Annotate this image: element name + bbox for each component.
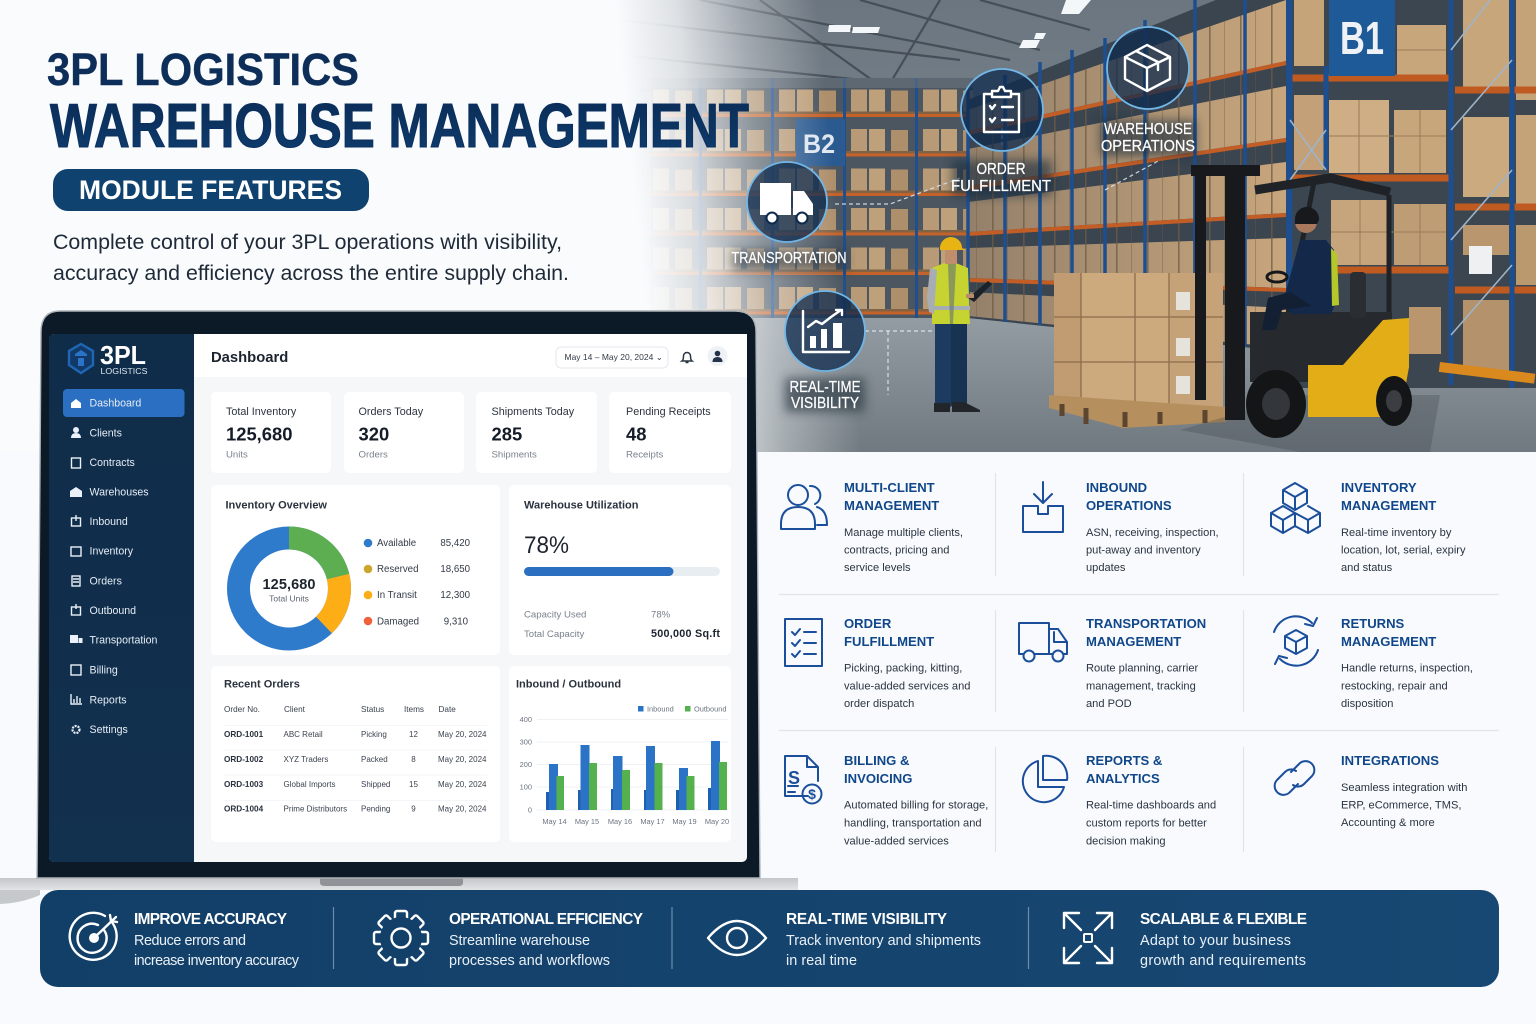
left fade overlay [0,0,900,452]
panel: warehouse utilization: Warehouse Utilization [524,500,639,512]
feature: transportation management: Route planning, carrier [1086,662,1199,674]
row ORD-1001: 12 [409,730,418,739]
KPI: orders today: Orders Today [358,406,424,418]
KPI: shipments today: 285 [492,424,522,444]
node: transportation [732,162,846,270]
row ORD-1001: ABC Retail [284,730,323,739]
x axis labels: May 16 [608,817,632,826]
x axis labels [542,817,729,826]
feature: order fulfillment: order dispatch [844,698,914,710]
nav: Orders: Orders [90,576,122,588]
nav: Outbound: Outbound [90,605,136,617]
active item highlight [63,389,184,417]
feature: billing & invoicing: Automated billing for storage, [844,800,988,812]
KPI: pending receipts: Pending Receipts [626,406,711,418]
feature: order fulfillment: ORDER [844,616,892,631]
feature: reports & analytics: REPORTS & [1086,753,1163,768]
screen background [49,334,747,862]
feature: transportation management [1019,616,1206,710]
legend: Outbound [694,704,726,714]
benefits banner [40,890,1499,987]
nav: Settings [72,724,128,736]
warehouse photo scene [0,0,1536,452]
benefit: improve accuracy: IMPROVE ACCURACY [134,911,288,928]
row ORD-1004: Pending [361,804,390,814]
x axis labels: May 19 [672,817,697,826]
row ORD-1003: 15 [409,780,418,789]
row ORD-1004: ORD-1004 [224,804,264,814]
y axis: 100 [520,782,532,792]
legend: Damaged [377,616,419,628]
donut chart [238,538,340,639]
progress bar [524,567,720,576]
subtitle: Complete control of your 3PL operations with visibility, [53,231,562,254]
node: order fulfillment [951,69,1052,196]
row ORD-1003 [224,780,487,789]
title line 2: WAREHOUSE MANAGEMENT [50,92,749,161]
nav: Settings: Settings [90,724,128,736]
feature: integrations: Accounting & more [1341,817,1435,829]
laptop with dashboard [0,311,798,904]
feature: multi-client management: MANAGEMENT [844,498,939,513]
feature: inbound operations: put-away and inventory [1086,544,1201,556]
subtitle: accuracy and efficiency across the entire supply chain. [53,262,569,285]
row ORD-1001 [224,730,487,739]
feature: billing & invoicing: BILLING & [844,753,910,768]
row ORD-1003: Global Imports [284,780,336,789]
feature: reports & analytics [1023,753,1216,848]
KPI: orders today: Orders [358,450,388,460]
y axis [520,715,728,814]
nav: Billing: Billing [90,664,118,676]
row ORD-1002: May 20, 2024 [438,755,487,764]
nav: Inbound: Inbound [90,516,128,528]
row ORD-1002: XYZ Traders [284,755,328,764]
x axis labels: May 14 [542,817,567,826]
nav: Clients: Clients [90,428,122,440]
row ORD-1002 [224,755,487,764]
table header [224,705,456,714]
feature: integrations [1275,753,1467,829]
legend: 9,310 [444,616,469,628]
icon: inbound box [1023,482,1063,532]
icon: eye [708,921,766,955]
row ORD-1004: Prime Distributors [284,804,347,814]
nav: Clients [71,427,122,440]
feature: billing & invoicing: INVOICING [844,771,912,786]
feature: multi-client management: MULTI-CLIENT [844,480,935,495]
legend: In Transit [377,590,417,601]
KPI: shipments today [476,392,597,473]
pallet of cartons [1049,273,1226,428]
KPI: orders today [344,392,464,473]
feature: inventory management: MANAGEMENT [1341,498,1436,513]
KPI: orders today: 320 [358,424,389,444]
label: REAL-TIME [790,379,860,396]
panel: recent orders [211,666,500,842]
benefit: operational efficiency: Streamline warehouse [449,933,590,949]
icon: clipboard [984,87,1019,132]
date range: May 14 – May 20, 2024 ⌄ [564,352,663,362]
feature: reports & analytics: decision making [1086,836,1166,848]
feature: order fulfillment [785,616,970,710]
panel: warehouse utilization: 500,000 Sq.ft [651,628,720,640]
panel: inbound / outbound chart [509,666,731,842]
icon: invoice [785,756,822,804]
row ORD-1001: Picking [361,730,387,739]
x axis labels: May 17 [640,817,665,826]
badge: module features [53,169,369,211]
feature: multi-client management [781,480,963,574]
KPI: total inventory: Total Inventory [226,406,297,418]
ceiling and back wall [600,0,1536,452]
icon: checklist [785,619,822,666]
icon: returns cycle [1274,616,1318,666]
row ORD-1001: ORD-1001 [224,730,264,739]
legend [364,538,471,628]
legend: Reserved [377,564,418,575]
benefit: improve accuracy: increase inventory accuracy [134,953,300,969]
y axis: 200 [520,760,532,769]
icon: target [70,913,117,960]
right big rack [1288,0,1536,388]
icon: invoice: S [788,768,800,788]
legend: 85,420 [440,538,471,549]
nav: Outbound [72,604,136,617]
KPI: pending receipts [609,392,731,473]
benefit: operational efficiency: OPERATIONAL EFFICIENCY [449,911,644,928]
logo: LOGISTICS [100,366,148,376]
KPI: total inventory: 125,680 [226,424,292,444]
legend: Available [377,538,416,549]
benefit: real-time visibility [708,911,981,969]
donut chart: 125,680 [262,577,316,593]
benefit: real-time visibility: REAL-TIME VISIBILITY [786,911,948,928]
feature: inbound operations: updates [1086,562,1126,574]
icon: gear [374,911,428,965]
row ORD-1004: 9 [411,804,416,814]
nav: Orders [72,576,122,588]
row ORD-1003: May 20, 2024 [438,780,487,789]
feature: returns management: Handle returns, inspection, [1341,662,1473,674]
feature: order fulfillment: FULFILLMENT [844,634,934,649]
bars [546,741,727,810]
connector lines [835,128,1160,395]
header bar: Dashboard [211,350,288,366]
feature: inbound operations: OPERATIONS [1086,498,1172,513]
row ORD-1004 [224,804,487,814]
table header: Items [404,705,424,714]
panel: warehouse utilization [509,485,731,655]
forklift with driver [1180,165,1440,452]
title line 1: 3PL LOGISTICS [47,44,359,95]
nav: Inventory: Inventory [90,546,134,558]
icon: truck [760,183,813,224]
nav: Warehouses: Warehouses [90,486,149,498]
nav: Inbound [72,515,128,528]
logo: 3PL [100,340,146,370]
date range [556,347,668,368]
logo [69,340,148,376]
icon: users [781,485,827,529]
icon: expand arrows [1064,913,1112,963]
benefit: real-time visibility: in real time [786,953,857,969]
icon: pie chart [1023,756,1067,802]
feature: integrations: INTEGRATIONS [1341,753,1439,768]
label: TRANSPORTATION [732,250,846,267]
benefit: operational efficiency [374,911,644,969]
feature: inventory management: Real-time inventory by [1341,527,1452,539]
sidebar [49,334,194,862]
back rack with boxes and B2 sign [650,78,974,318]
label: WAREHOUSE [1104,121,1192,138]
feature: transportation management: and POD [1086,698,1132,710]
x axis labels: May 15 [575,817,599,826]
feature: reports & analytics: ANALYTICS [1086,771,1160,786]
feature: transportation management: TRANSPORTATION [1086,616,1206,631]
label: OPERATIONS [1101,138,1195,155]
receding rack [968,0,1290,352]
x axis labels: May 20 [705,817,729,826]
y axis: 400 [520,715,532,724]
KPI: shipments today: Shipments Today [492,406,575,418]
nav: Contracts: Contracts [90,457,135,469]
feature: inventory management: INVENTORY [1341,480,1417,495]
icon: invoice: $ [808,786,816,802]
benefit: improve accuracy [70,911,300,969]
panel: warehouse utilization: Total Capacity [524,629,584,640]
panel: inventory overview [211,485,500,655]
feature: multi-client management: service levels [844,562,911,574]
feature: inventory management [1271,480,1466,574]
feature: inbound operations: INBOUND [1086,480,1147,495]
legend: 12,300 [440,590,471,601]
legend: 18,650 [440,564,471,575]
feature: returns management: MANAGEMENT [1341,634,1436,649]
panel: recent orders: Recent Orders [224,678,300,690]
feature: returns management: disposition [1341,698,1393,710]
feature: reports & analytics: custom reports for better [1086,818,1207,830]
legend: Inbound [647,704,674,714]
feature: returns management [1274,616,1473,710]
laptop bezel [37,311,760,878]
node: real-time visibility [785,291,865,412]
feature: transportation management: MANAGEMENT [1086,634,1181,649]
icon: user avatar [708,346,728,366]
row ORD-1004: May 20, 2024 [438,804,487,814]
icon: carton [1125,45,1170,91]
table header: Date [438,705,456,714]
feature: reports & analytics: Real-time dashboards and [1086,800,1216,812]
title block [47,44,749,285]
y axis: 300 [520,738,532,746]
row ORD-1001: May 20, 2024 [438,730,487,739]
feature: order fulfillment: value-added services and [844,680,970,692]
nav: Reports [71,694,127,706]
benefit: scalable & flexible: Adapt to your business [1140,933,1291,949]
panel: warehouse utilization: 78% [651,610,671,620]
worker with tablet [927,237,992,412]
benefit: operational efficiency: processes and workflows [449,953,610,969]
table header: Status [361,705,384,714]
label: FULFILLMENT [951,178,1051,195]
feature: billing & invoicing: handling, transportation and [844,818,982,830]
icon: chain link [1275,761,1314,795]
icon: bell [682,352,692,362]
KPI: pending receipts: 48 [626,424,646,444]
feature: multi-client management: contracts, pricing and [844,544,949,556]
label: ORDER [976,161,1026,178]
floor [600,318,1536,452]
benefit: improve accuracy: Reduce errors and [134,933,246,949]
benefit: scalable & flexible: growth and requirements [1140,953,1306,969]
panel: warehouse utilization: 78% [524,532,569,559]
nav: Dashboard: Dashboard [90,398,141,410]
feature: integrations: ERP, eCommerce, TMS, [1341,800,1461,812]
icon: truck [1019,623,1067,654]
legend [638,704,726,714]
table header: Client [284,705,306,714]
nav: Inventory [71,546,134,558]
icon: rising chart [803,310,849,352]
KPI: shipments today: Shipments [492,450,537,460]
feature: inbound operations: ASN, receiving, inspection, [1086,527,1219,539]
rack sign B1: B1 [1340,12,1384,64]
KPI: total inventory: Units [226,450,248,460]
donut chart: Total Units [269,594,309,604]
nav: Reports: Reports [90,694,127,706]
feature: multi-client management: Manage multiple clients, [844,527,963,539]
badge: module features: MODULE FEATURES [79,175,342,205]
panel: warehouse utilization: Capacity Used [524,610,586,620]
nav: Transportation: Transportation [90,634,158,646]
panel: inbound / outbound chart: Inbound / Outbound [516,678,621,690]
feature: order fulfillment: Picking, packing, kitting, [844,662,962,674]
table header: Order No. [224,705,260,714]
feature: billing & invoicing [785,753,988,848]
KPI: total inventory [211,392,331,473]
back rack with boxes and B2 sign: B2 [803,129,835,159]
node: warehouse operations [1100,27,1196,156]
feature: returns management: RETURNS [1341,616,1405,631]
features grid [779,473,1499,852]
feature: transportation management: management, tracking [1086,680,1196,692]
laptop base [0,878,798,904]
feature: returns management: restocking, repair and [1341,680,1448,692]
benefit: scalable & flexible: SCALABLE & FLEXIBLE [1140,911,1307,928]
feature: inventory management: and status [1341,562,1393,574]
row ORD-1003: ORD-1003 [224,780,264,789]
panel: inventory overview: Inventory Overview [226,500,327,512]
feature: inbound operations [1023,480,1219,574]
benefit: real-time visibility: Track inventory and shipments [786,933,981,949]
benefit: scalable & flexible [1064,911,1307,969]
feature: integrations: Seamless integration with [1341,782,1467,794]
icon: stacked cubes [1271,483,1320,533]
y axis: 0 [528,806,532,814]
feature: billing & invoicing: value-added services [844,836,949,848]
feature: inventory management: location, lot, serial, expiry [1341,544,1466,556]
row ORD-1002: ORD-1002 [224,755,264,764]
KPI: pending receipts: Receipts [626,450,664,460]
row ORD-1002: 8 [411,755,416,764]
label: VISIBILITY [791,395,859,412]
nav: Billing [71,664,118,676]
rack sign B1 [1329,0,1395,76]
header bar [194,334,747,377]
row ORD-1003: Shipped [361,780,390,789]
row ORD-1002: Packed [361,755,388,764]
